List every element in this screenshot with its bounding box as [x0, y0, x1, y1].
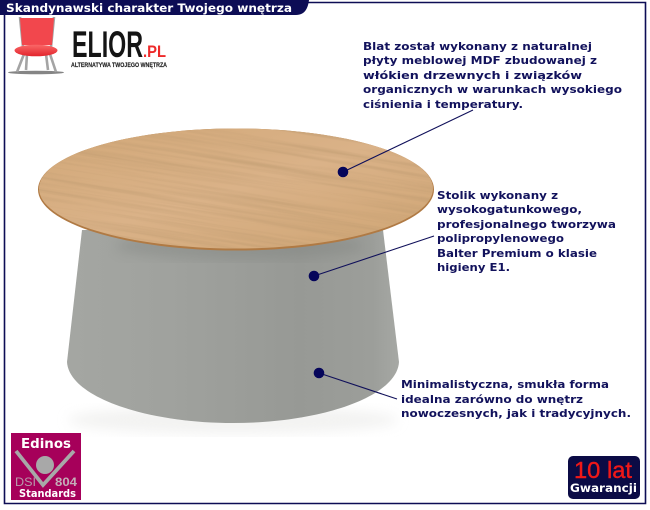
callout text: top material: włókien drzewnych i związków	[363, 69, 582, 82]
callout text: top material: płyty meblowej MDF zbudowanej z	[363, 54, 597, 67]
callout text: body material: Balter Premium o klasie	[437, 247, 597, 260]
arrow: form pointer	[314, 368, 397, 399]
arrow: top pointer	[338, 110, 473, 177]
callout: form	[314, 368, 631, 420]
table top	[38, 128, 434, 250]
callout: table body	[309, 189, 616, 281]
callout text: body material: wysokogatunkowego,	[437, 203, 582, 216]
callout text: top material: organicznych w warunkach wysokiego	[363, 83, 622, 96]
badge: 10 lat Gwarancji: 10 lat	[574, 457, 633, 483]
callout text: body material: profesjonalnego tworzywa	[437, 218, 616, 231]
table illustration	[38, 128, 434, 432]
title bar: Skandynawski charakter Twojego wnętrza	[6, 1, 292, 15]
callout text: form	[401, 378, 631, 420]
icon: red chair	[8, 17, 64, 74]
logo wordmark: ELIOR	[72, 24, 143, 65]
callout text: body material: polipropylenowego	[437, 232, 564, 245]
logo: Elior: .PL	[143, 42, 166, 61]
badge: Edinos Standards: Standards	[19, 488, 76, 500]
callout text: top material: ciśnienia i temperatury.	[363, 98, 523, 111]
badge: Edinos Standards: Edinos	[21, 436, 71, 452]
callout text: body material: Stolik wykonany z	[437, 189, 558, 202]
badge: 10 lat Gwarancji	[568, 456, 640, 499]
callout text: form: idealna zarówno do wnętrz	[401, 393, 583, 406]
logo: Elior	[8, 17, 167, 74]
callout text: form: nowoczesnych, jak i tradycyjnych.	[401, 407, 631, 420]
logo tagline: ALTERNATYWA TWOJEGO WNĘTRZA	[71, 62, 167, 69]
badge: Edinos Standards	[11, 433, 81, 500]
callout text: top material: Blat został wykonany z naturalnej	[363, 40, 592, 53]
floor shadow	[68, 406, 398, 434]
callout text: form: Minimalistyczna, smukła forma	[401, 378, 609, 391]
callout text: top material	[363, 40, 622, 111]
arrow: body pointer	[309, 236, 434, 281]
badge: Edinos Standards: DSI	[15, 475, 36, 489]
callout text: body material: higieny E1.	[437, 261, 510, 274]
badge: Edinos Standards: 804	[55, 475, 77, 489]
callout: table top	[338, 40, 622, 177]
callout text: body material	[437, 189, 616, 274]
table base	[67, 230, 399, 423]
badge: 10 lat Gwarancji: Gwarancji	[570, 481, 637, 495]
